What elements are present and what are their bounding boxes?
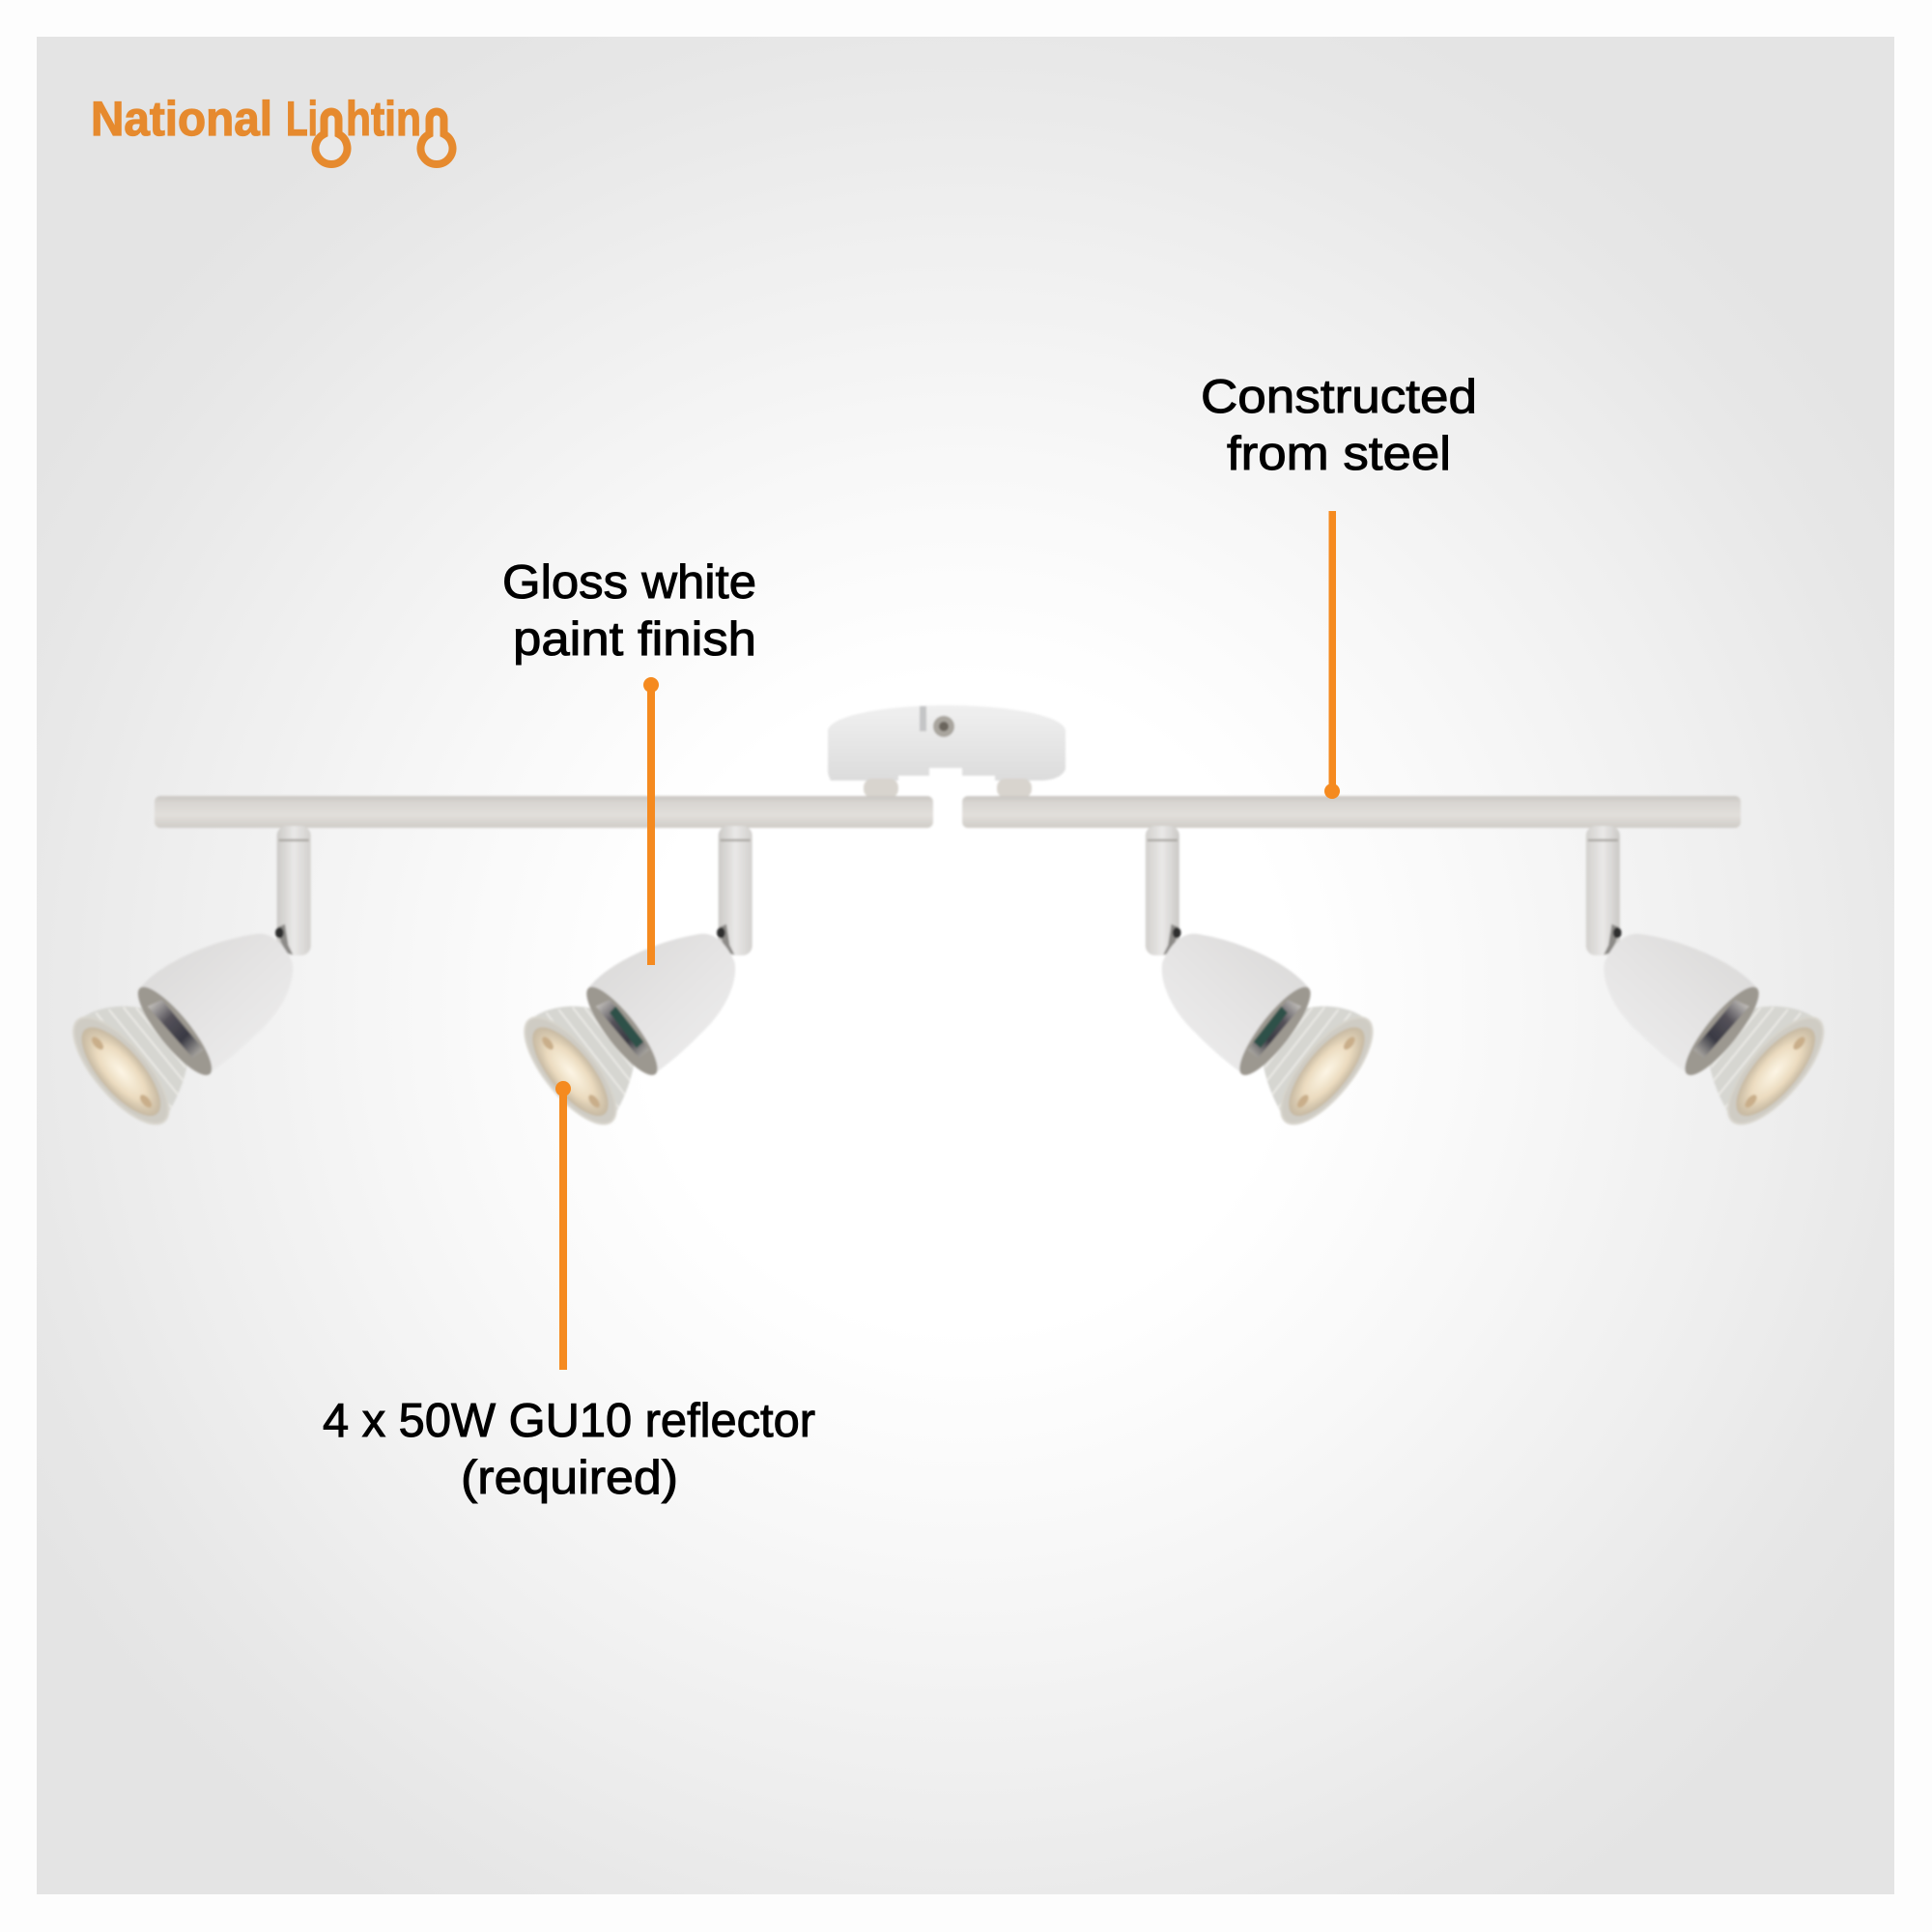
callout arrow: constructed from steel [1324,511,1340,799]
logo: National Lighting [91,92,452,164]
spotlight fixture [58,705,1838,1138]
callout arrow: gloss white paint finish [643,677,659,965]
lamp 1 [58,826,311,1138]
logo: National Lighting: htin [346,92,421,146]
logo: National Lighting: National [91,92,272,146]
lamp 4 [1586,826,1838,1138]
callout text: constructed from steel: Constructed [1201,371,1477,423]
logo: National Lighting: Li [286,92,318,146]
right rail [962,796,1741,828]
callout text: gloss white paint finish: paint finish [513,613,756,666]
lamp 2 [510,826,753,1138]
callout text: constructed from steel: from steel [1227,428,1451,480]
callout text: GU10 reflector [323,1395,815,1504]
callout text: gloss white paint finish: Gloss white [502,556,756,609]
callout text: GU10 reflector: 4 x 50W GU10 reflector [323,1395,815,1447]
callout text: gloss white paint finish [502,556,756,666]
callout text: constructed from steel [1201,371,1477,480]
callout text: GU10 reflector: (required) [461,1452,678,1504]
lamp 3 [1146,826,1387,1138]
callout arrow: GU10 reflector [555,1081,571,1370]
ceiling plate [828,705,1065,836]
left rail [155,796,933,828]
